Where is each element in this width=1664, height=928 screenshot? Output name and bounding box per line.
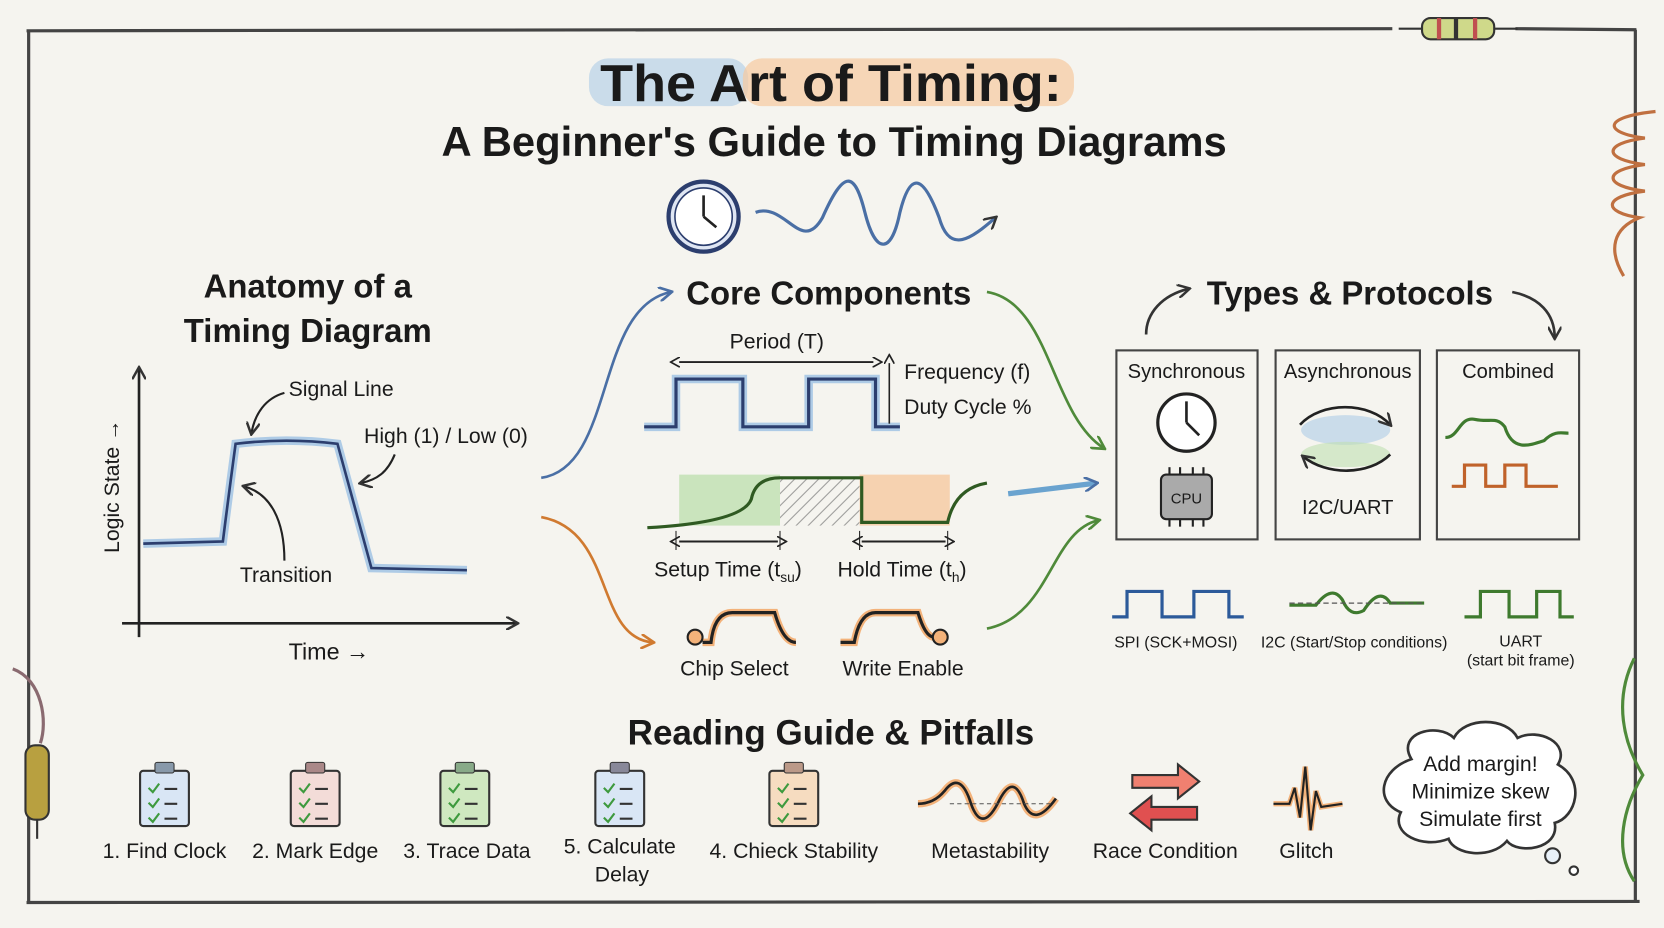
icon: metastability (918, 783, 1056, 863)
box: synchronous (1116, 350, 1258, 539)
step labels: 2. Mark Edge (252, 840, 378, 863)
chart: setup and hold: ) (960, 559, 967, 582)
box: asynchronous: I2C/UART (1302, 497, 1393, 519)
chart: signal diagram: Transition (240, 564, 332, 587)
step labels: 3. Trace Data (403, 840, 531, 863)
panel: core components (541, 275, 1104, 680)
icon: metastability: Metastability (931, 840, 1049, 863)
decoration: right wire (1623, 658, 1643, 881)
box: asynchronous: Asynchronous (1284, 361, 1412, 383)
chart: signal diagram: High (1) / Low (0) (364, 425, 528, 448)
chart: chip select and write enable: Write Enable (843, 657, 964, 680)
chart: period clock (644, 330, 1032, 427)
icon: clock and wave (669, 181, 995, 252)
callout: thought cloud (1384, 722, 1578, 875)
chart: setup and hold: su (780, 570, 795, 585)
protocol waves: (start bit frame) (1467, 653, 1575, 670)
arrows: flow curves (541, 292, 1104, 642)
step labels: 1. Find Clock (103, 840, 227, 863)
icon: glitch (1273, 767, 1342, 863)
icon: race condition: Race Condition (1093, 840, 1238, 863)
chart: setup and hold: Setup Time (t (654, 559, 780, 582)
icons: clipboards (140, 762, 818, 826)
chart: signal diagram: Logic State → (101, 420, 124, 553)
box: asynchronous (1276, 350, 1420, 539)
decoration: coil right (1612, 111, 1656, 276)
chart: setup and hold: Hold Time (t (837, 559, 952, 582)
icon: glitch: Glitch (1279, 840, 1333, 863)
chart: chip select and write enable (680, 613, 964, 680)
protocol waves: SPI (SCK+MOSI) (1114, 635, 1237, 652)
heading: core components: Core Components (686, 275, 971, 312)
step labels: 5. Calculate (564, 836, 676, 859)
panel: reading guide (103, 713, 1578, 886)
callout: thought cloud: Simulate first (1419, 808, 1542, 831)
chart: period clock: Duty Cycle % (904, 396, 1032, 419)
chart: signal diagram (101, 368, 528, 664)
heading: anatomy: Timing Diagram (184, 312, 432, 349)
heading: types: Types & Protocols (1207, 275, 1493, 312)
chart: setup and hold (647, 475, 987, 585)
callout: thought cloud: Minimize skew (1411, 780, 1550, 803)
chart: signal diagram: Signal Line (289, 378, 394, 401)
box: synchronous: Synchronous (1128, 361, 1245, 383)
chart: chip select and write enable: Chip Select (680, 657, 789, 680)
decoration: resistor top (1399, 18, 1518, 39)
step labels (103, 836, 878, 886)
title: The Art of Timing: (600, 55, 1062, 113)
chart: setup and hold: h (952, 570, 960, 585)
chart: setup and hold: ) (795, 559, 802, 582)
panel: anatomy (101, 267, 528, 664)
box: combined (1437, 350, 1579, 539)
box: synchronous: CPU (1171, 491, 1202, 507)
heading: reading guide: Reading Guide & Pitfalls (628, 713, 1034, 752)
panel: types and protocols (1112, 275, 1579, 670)
protocol waves: I2C (Start/Stop conditions) (1261, 635, 1447, 652)
box: combined: Combined (1462, 361, 1554, 383)
heading: anatomy: Anatomy of a (204, 267, 412, 304)
protocol waves: UART (1499, 634, 1543, 651)
chart: signal diagram: Time → (289, 638, 369, 664)
icon: race condition (1093, 764, 1238, 863)
subtitle: A Beginner's Guide to Timing Diagrams (441, 119, 1227, 165)
decoration: left resistor (13, 669, 49, 839)
chart: period clock: Period (T) (730, 330, 824, 353)
protocol waves (1112, 591, 1575, 670)
step labels: Delay (595, 863, 649, 886)
step labels: 4. Chieck Stability (709, 840, 878, 863)
chart: period clock: Frequency (f) (904, 361, 1030, 384)
callout: thought cloud: Add margin! (1423, 753, 1538, 776)
